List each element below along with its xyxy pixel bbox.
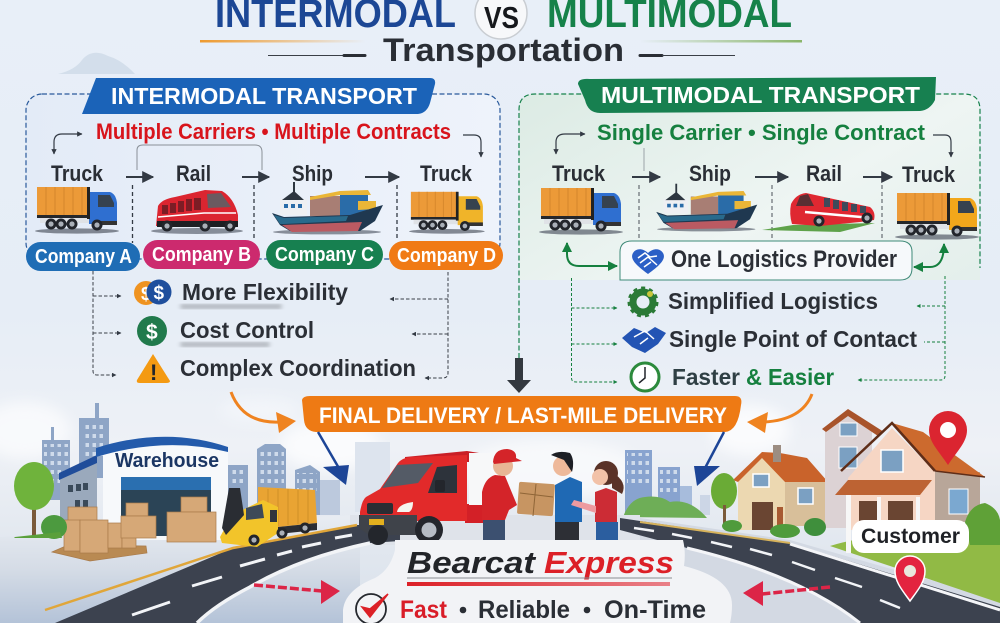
label: customer: Customer [861,525,960,548]
house small [733,445,828,530]
pill: company c [266,240,383,269]
icon: small location pin [895,556,925,601]
scene: city buildings left [42,403,390,515]
subtitle: multiple carriers: Multiple Carriers • Multiple Contracts [96,119,451,144]
icon: clock [631,363,659,391]
text: faster and easier [672,364,834,390]
text: more flexibility: More Flexibility [182,279,348,305]
label: rail: Rail [176,161,211,186]
arrow: red dashed right [743,581,830,606]
icon: handshake [622,327,666,353]
icon: yellow truck [409,192,485,234]
label: rail: Rail [806,161,842,186]
icon: dollar [137,316,167,346]
icon: blue truck [539,188,623,235]
tagline [400,596,706,623]
label: ship: Ship [292,161,333,186]
decorative cloud hill [58,53,135,74]
icon: red train [151,190,243,234]
arrow: green left double [567,243,617,266]
icon: warning [137,354,170,385]
arrow: bent right [933,135,951,157]
background clouds [0,398,790,500]
text: cost control: Cost Control [180,317,314,343]
box: one logistics provider: One Logistics Provider [671,246,897,273]
driver [482,449,522,541]
house tower [822,409,884,528]
panel: multimodal transport [519,77,980,358]
panel: intermodal transport [26,78,503,271]
arrow: blue right [694,432,724,486]
label: truck: Truck [552,161,606,186]
houses [711,409,1000,553]
arrow: from right to flexibility [390,298,448,300]
box: one logistics provider [620,241,912,280]
text: faster and easier: Faster [672,364,740,390]
pill: company a: Company A [35,246,132,268]
benefits list: multimodal [572,276,945,391]
icon: ship [272,182,383,234]
text: single point of contact: Single Point of Contact [669,326,917,352]
icon: gear [629,288,657,316]
subtitle: single carrier: Single Carrier • Single Contract [597,120,926,145]
arrow: to point of contact [572,343,617,345]
arrow: to more flexibility [93,295,121,297]
logo: bearcat express [407,545,674,586]
header: multimodal transport [578,77,936,113]
icon: yellow truck [895,193,979,240]
panel: bearcat express [343,540,732,623]
arrow: bent right [463,135,481,157]
badge: vs: VS [484,0,519,35]
pill: company a [26,242,140,271]
arrow: to simplified logistics [572,307,617,309]
banner: final delivery [302,396,741,432]
icon: red train [762,193,875,232]
scene: city buildings right [623,450,710,518]
people and package [482,449,624,541]
icon: coins: $ [154,283,164,304]
label: warehouse: Warehouse [115,450,219,472]
header: intermodal transport [82,78,435,114]
house main [835,423,985,553]
text: complex coordination: Complex Coordination [180,355,416,381]
arrow: ship to rail [755,176,788,178]
label: truck: Truck [51,161,104,186]
tree and bush [14,462,67,539]
warehouse [52,436,228,561]
icon: coins [134,280,172,305]
icon: warning: ! [150,360,157,385]
customer woman [571,461,624,541]
bushes [965,503,1000,545]
logo: bearcat express: Express [544,545,674,580]
arrow: rail to ship [242,176,269,178]
forklift truck [220,487,317,547]
icon: dollar: $ [146,321,158,344]
arrow: down to delivery [507,358,531,393]
arrow: from right to simplified [917,305,945,307]
package [517,482,555,516]
arrow: green right double [914,244,944,267]
icon: check [356,594,388,623]
pill: company b: Company B [152,244,251,266]
boxes [52,497,216,561]
logo: bearcat express: Bearcat [407,545,537,580]
pill: company c: Company C [275,244,374,266]
header: multimodal transport: MULTIMODAL TRANSPORT [601,82,920,108]
arrow: blue left [318,432,349,485]
arrow: ship to truck [365,176,399,178]
arrow: bent left [54,134,82,154]
icon: heart handshake [632,249,664,274]
pill: company b [143,240,260,269]
text: simplified logistics: Simplified Logistics [668,288,878,314]
arrow: from right to cost [412,333,448,335]
arrow: to cost control [93,332,121,334]
scene: road and ground [0,515,1000,623]
pill: company d: Company D [397,245,496,267]
arrow: truck to rail [126,176,153,178]
icon: coins: $ [141,284,151,304]
arrow: truck to ship [632,176,660,178]
benefits list: intermodal [93,271,448,385]
icon: big location pin [929,411,967,465]
arrow: red dashed left [254,580,340,604]
pill: company d [389,241,503,270]
header: intermodal transport: INTERMODAL TRANSPORT [111,83,417,109]
title [200,0,802,68]
delivery van [359,451,493,545]
arrow: orange left [231,392,296,433]
label: truck: Truck [902,162,956,187]
customer man [551,452,582,541]
label: truck: Truck [420,161,473,186]
label: customer [852,520,969,553]
icon: ship [656,184,757,231]
arrow: bent left [556,134,585,154]
heading: transportation: Transportation [383,32,624,68]
icon: blue truck [35,187,119,234]
arrow: rail to truck [863,176,892,178]
label: ship: Ship [689,161,731,186]
arrow: orange right [747,394,812,433]
text: faster and easier: & Easier [746,364,834,390]
banner: final delivery: FINAL DELIVERY / LAST-MILE DELIVERY [319,403,727,428]
